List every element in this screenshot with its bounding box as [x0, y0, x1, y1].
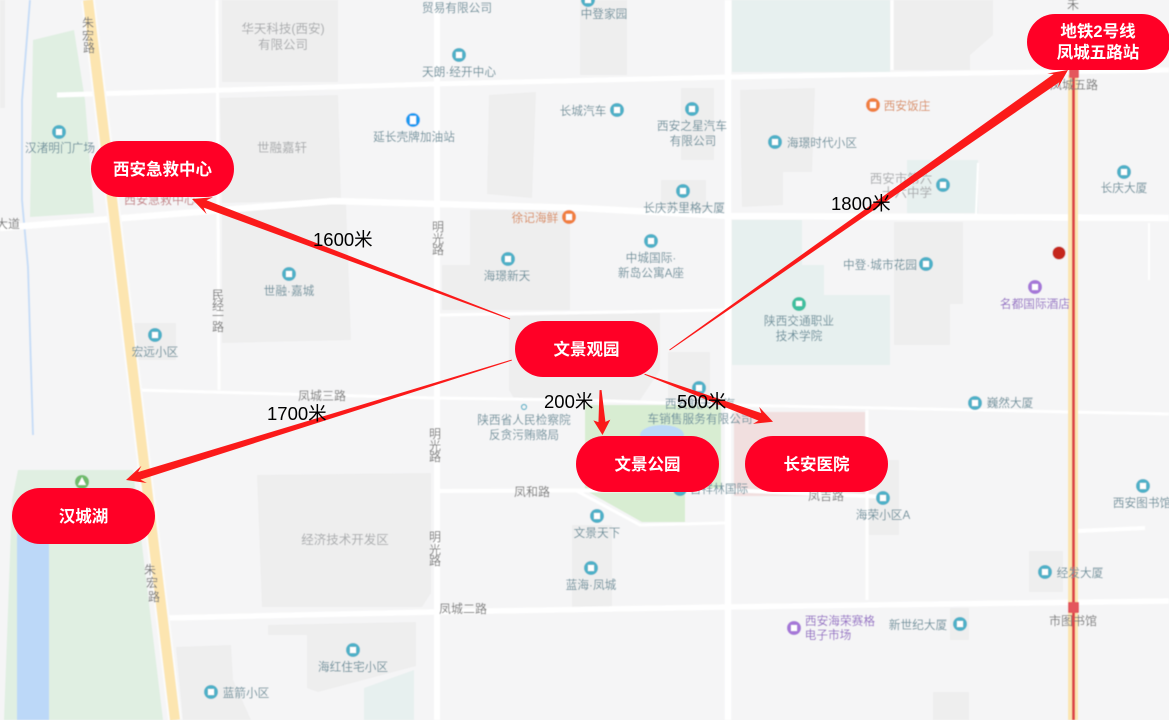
distance: 1800米: 1800米 — [831, 193, 891, 214]
POI: 文景天下 — [574, 509, 621, 540]
road names: 路 — [148, 589, 160, 604]
POI: 长庆苏里格大厦 — [643, 184, 725, 215]
road names: 光 — [429, 543, 441, 557]
POI: 徐记海鲜: 徐记海鲜 — [512, 211, 559, 225]
POI: 西安之星汽车: 西安之星汽车 — [657, 119, 727, 133]
metro line 2 — [1068, 75, 1078, 720]
distance: 500米: 500米 — [677, 391, 726, 412]
road names: 市图书馆 — [1049, 613, 1097, 628]
park pond — [640, 425, 684, 445]
icon: metro station 市图书馆 — [1068, 602, 1079, 613]
arrow: to 长安医院 — [641, 366, 776, 430]
POI: 世融·嘉城 — [264, 267, 315, 298]
road: 朱宏路 — [88, 0, 175, 720]
POI: 西安饭庄 — [866, 98, 931, 113]
pill: 地铁2号线凤城五路站: 凤城五路站 — [1057, 42, 1139, 62]
hospital grounds — [734, 412, 865, 496]
POI: 海荣小区A — [856, 491, 910, 522]
arrow: to 西安急救中心 — [189, 191, 513, 327]
road names: 朱 — [82, 16, 94, 30]
POI: 海荣小区A: 海荣小区A — [856, 508, 910, 522]
icon: tree in 汉城湖 — [75, 475, 89, 489]
POI: 延长壳牌加油站: 延长壳牌加油站 — [373, 130, 455, 144]
area names: 西安市第六 — [870, 171, 932, 186]
POI: 海璟新天 — [484, 252, 531, 283]
POI: 延长壳牌加油站 — [373, 113, 455, 144]
POI: 蓝海·凤城: 蓝海·凤城 — [566, 578, 617, 592]
POI: 西安之星汽车 — [657, 102, 727, 148]
POI: 宏远小区: 宏远小区 — [132, 345, 179, 359]
pill: 文景公园: 文景公园 — [614, 454, 680, 474]
POI: 经发大厦 — [1038, 565, 1104, 580]
POI: 海璟新天: 海璟新天 — [484, 269, 531, 283]
POI: 陕西交通职业技术学院: 陕西交通职业 — [764, 314, 834, 328]
POI: 中城国际: 中城国际· — [626, 251, 676, 265]
POI: 中城国际: 新岛公寓A座 — [618, 266, 684, 280]
distance: 200米: 200米 — [544, 391, 593, 412]
road names: 经 — [212, 299, 224, 313]
distance: 1700米: 1700米 — [267, 403, 327, 424]
POI: 宏远小区 — [132, 328, 179, 359]
POI: 徐记海鲜 — [512, 210, 576, 225]
POI: 中登家园 — [581, 0, 627, 21]
POI: 陕西交通职业技术学院 — [764, 297, 834, 343]
road names: 凤城三路 — [298, 388, 346, 403]
POI: 中城国际 — [618, 234, 684, 280]
road names: 宏 — [146, 575, 158, 590]
POI: 世融·嘉城: 世融·嘉城 — [264, 285, 315, 298]
pill: 地铁2号线凤城五路站 — [1027, 14, 1169, 70]
POI: 汉渚明门广场: 汉渚明门广场 — [25, 141, 95, 155]
road names: 明 — [429, 530, 441, 544]
road names: 宏 — [82, 28, 94, 43]
POI: 陕西交通职业技术学院: 技术学院 — [776, 329, 823, 343]
POI: 海璟时代小区: 海璟时代小区 — [787, 136, 857, 150]
area names: 世融嘉轩 — [257, 141, 307, 155]
icon: metro station 凤城五路 — [1069, 67, 1079, 78]
lake water — [17, 530, 49, 720]
POI: 长城汽车 — [560, 103, 624, 118]
POI: 西安饭庄: 西安饭庄 — [884, 99, 931, 113]
icon: red marker — [1052, 246, 1066, 260]
river — [22, 0, 33, 435]
POI: 蓝箭小区: 蓝箭小区 — [223, 686, 270, 700]
distance: 1600米: 1600米 — [313, 229, 373, 250]
POI: 文景天下: 文景天下 — [574, 526, 621, 540]
POI: 中登家园: 中登家园 — [581, 7, 627, 21]
POI: 天朗·经开中心 — [422, 48, 496, 79]
road names: 路 — [212, 319, 224, 334]
road names: 凤和路 — [514, 484, 550, 499]
POI: 海璟时代小区 — [768, 135, 857, 150]
pill: 地铁2号线凤城五路站: 地铁2号线 — [1060, 22, 1136, 41]
POI: 西安海荣赛格电子市场: 西安海荣赛格 — [805, 614, 875, 628]
road names: 路 — [429, 553, 441, 568]
POI: 陕西省人民检察院 — [477, 404, 571, 442]
road names: 民 — [212, 288, 224, 302]
POI: 西安海荣赛格电子市场 — [787, 614, 875, 642]
POI: 名都国际酒店: 名都国际酒店 — [1000, 297, 1070, 311]
arrow: to 文景公园 — [592, 390, 611, 435]
road names: 路 — [432, 242, 444, 257]
POI: 西安航天中汽: 车销售服务有限公司 — [647, 412, 753, 426]
road names: 凤城五路 — [1050, 77, 1098, 92]
POI: 巍然大厦: 巍然大厦 — [987, 396, 1034, 410]
area names: 华天科技(西安) — [241, 21, 325, 36]
POI: 巍然大厦 — [968, 396, 1034, 410]
road names: 凤城二路 — [439, 601, 487, 616]
road names: 光 — [432, 232, 444, 246]
POI: 新世纪大厦: 新世纪大厦 — [889, 618, 948, 632]
park: 汉城湖 — [4, 470, 163, 720]
pill: 文景公园 — [576, 436, 719, 492]
road names: 凤吉路 — [808, 488, 844, 503]
POI: 西安海荣赛格电子市场: 电子市场 — [805, 628, 851, 642]
arrow: to 地铁站 — [664, 63, 1073, 357]
POI: 长庆大厦 — [1101, 165, 1148, 195]
road names: 朱 — [144, 563, 156, 577]
park: 文景公园 — [585, 405, 721, 522]
green area: 汉渚明门广场 — [30, 30, 94, 217]
area names: 经济技术开发区 — [301, 532, 389, 547]
campus areas — [364, 0, 978, 720]
pill: 长安医院: 长安医院 — [784, 454, 850, 474]
POI: 西安航天中汽 — [647, 381, 753, 426]
pill: 西安急救中心: 西安急救中心 — [113, 159, 212, 179]
road names: 光 — [429, 439, 441, 453]
POI: 名都国际酒店 — [1000, 280, 1070, 311]
pill: 文景观园: 文景观园 — [554, 339, 620, 359]
POI: 中登·城市花园: 中登·城市花园 — [843, 258, 917, 272]
POI: 贸易有限公司: 贸易有限公司 — [422, 1, 492, 15]
POI: 海红住宅小区: 海红住宅小区 — [318, 660, 388, 674]
POI: 西安图书馆 — [1113, 479, 1169, 510]
pill: 西安急救中心 — [91, 141, 234, 197]
POI: 汉渚明门广场 — [25, 125, 95, 155]
map label: 西安急救中心: 西安急救中心 — [124, 192, 196, 207]
POI: 天朗·经开中心: 天朗·经开中心 — [422, 65, 496, 79]
POI: 长庆苏里格大厦: 长庆苏里格大厦 — [643, 201, 725, 215]
arrow: to 汉城湖 — [123, 351, 514, 489]
road names: 明 — [432, 220, 444, 234]
road names: 路 — [429, 449, 441, 464]
pill: 汉城湖 — [12, 488, 155, 544]
POI: 经发大厦: 经发大厦 — [1057, 566, 1104, 580]
POI: 西安航天中汽: 西安航天中汽 — [665, 397, 735, 411]
road names: 路 — [83, 40, 95, 55]
POI: 海红住宅小区 — [318, 643, 388, 674]
pill: 文景观园 — [515, 321, 658, 377]
POI: 蓝箭小区 — [204, 685, 270, 700]
area names — [241, 21, 932, 547]
road names: 明 — [429, 427, 441, 441]
area names: 有限公司 — [258, 38, 308, 52]
POI: 第六中学 icon — [936, 178, 950, 192]
pill: 长安医院 — [745, 436, 888, 492]
POI: 新世纪大厦 — [889, 617, 967, 632]
POI: 吉祥林国际: 吉祥林国际 — [690, 482, 749, 496]
pill: 汉城湖: 汉城湖 — [59, 506, 108, 526]
POI: 西安之星汽车: 有限公司 — [670, 134, 716, 148]
POI: 陕西省人民检察院: 反贪污贿赂局 — [489, 428, 559, 442]
POI: 长庆大厦: 长庆大厦 — [1101, 181, 1148, 195]
area names: 十六中学 — [882, 185, 932, 200]
POI: 陕西省人民检察院: 陕西省人民检察院 — [477, 413, 571, 427]
POI: 蓝海·凤城 — [566, 561, 617, 592]
POI: 长城汽车: 长城汽车 — [560, 104, 606, 118]
road names: 一 — [212, 309, 224, 323]
